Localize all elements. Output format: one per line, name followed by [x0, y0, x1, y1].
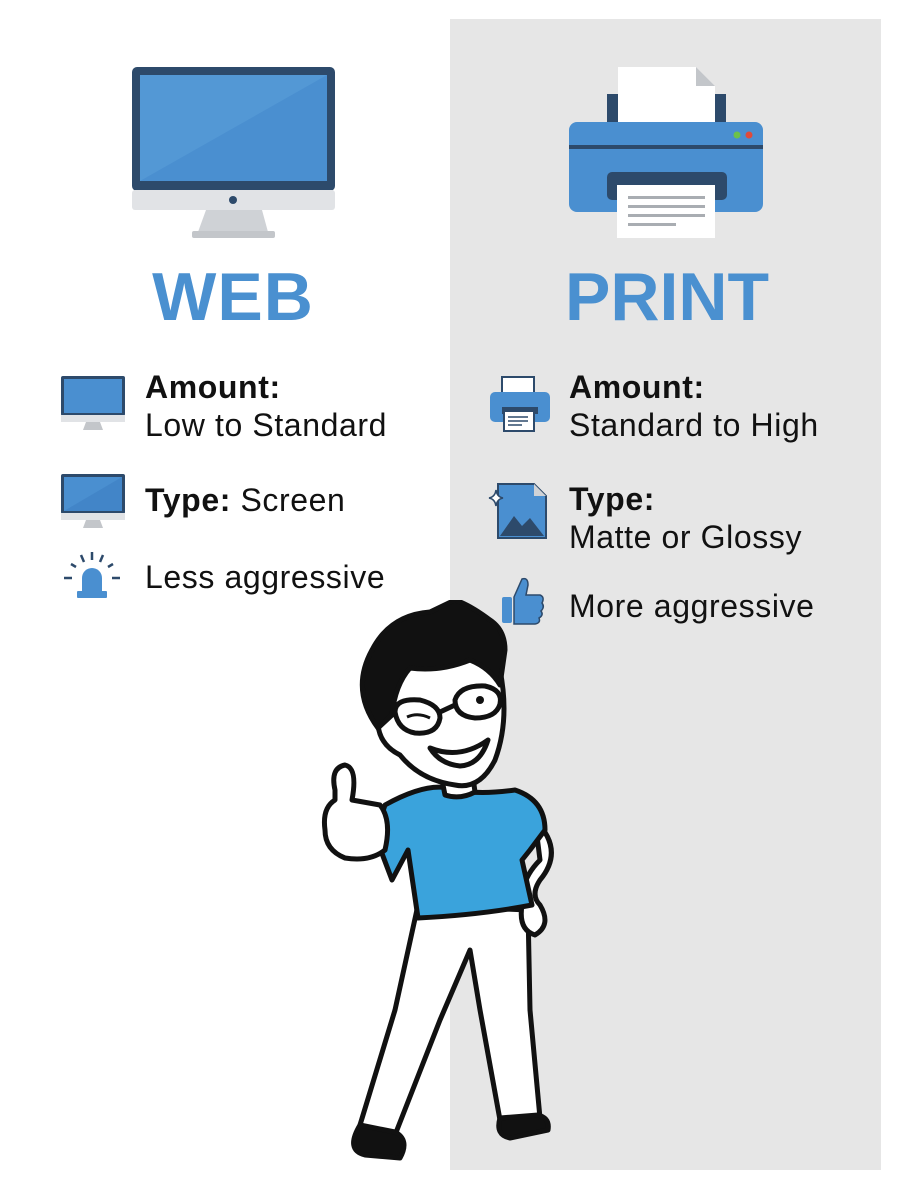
text: less aggressive: Less aggressive — [145, 559, 385, 595]
icon: image file — [488, 483, 547, 539]
text: web type: Type: Screen — [145, 482, 345, 518]
text: print type — [569, 481, 802, 555]
panel: print background — [450, 19, 881, 1170]
icon: thumbs up — [502, 578, 544, 625]
text: more aggressive: More aggressive — [569, 588, 815, 624]
text: print amount: Standard to High — [569, 407, 819, 443]
icon: printer — [569, 67, 763, 238]
illustration: thumbs-up character — [322, 600, 554, 1160]
icon: siren — [64, 552, 120, 598]
text: print amount — [569, 369, 819, 443]
text: print type: Matte or Glossy — [569, 519, 802, 555]
heading: WEB: WEB — [152, 259, 314, 335]
heading: PRINT: PRINT — [565, 259, 769, 335]
text: web amount: Amount: — [145, 369, 281, 405]
text: web amount: Low to Standard — [145, 407, 387, 443]
text: web amount — [145, 369, 387, 443]
text: print type: Type: — [569, 481, 655, 517]
icon: small monitor type — [61, 474, 125, 528]
text: print amount: Amount: — [569, 369, 705, 405]
icon: web monitor — [132, 67, 335, 238]
icon: small printer — [490, 376, 550, 432]
icon: small monitor amount — [61, 376, 125, 430]
